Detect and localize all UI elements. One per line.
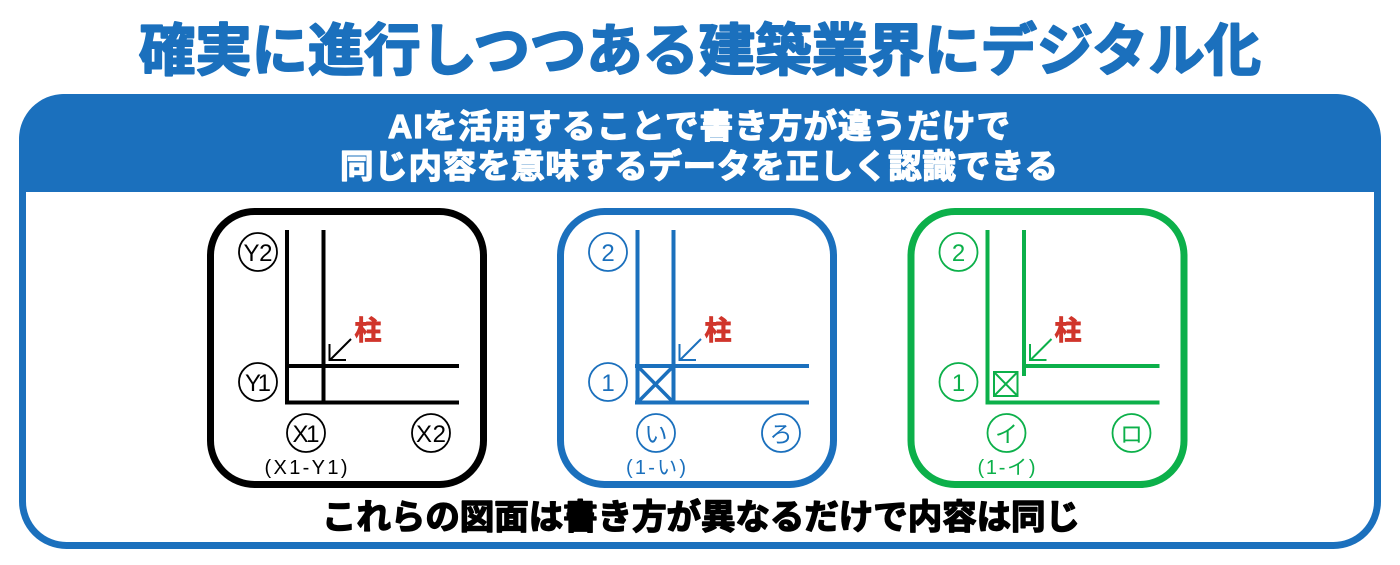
axis labels: イ	[995, 421, 1018, 447]
grid lines	[986, 230, 1160, 404]
axis labels: 1	[952, 370, 965, 397]
axis labels: 1	[601, 370, 615, 397]
column leader arrow	[330, 339, 351, 360]
axis labels: (1-い)	[626, 457, 686, 479]
column label: 柱	[704, 316, 732, 346]
header text: AIを活用することで書き方が違うだけで	[388, 108, 1010, 146]
axis labels: (X1-Y1)	[264, 457, 348, 479]
axis labels: X1	[292, 421, 320, 448]
header text	[340, 108, 1058, 186]
axis labels: 2	[601, 240, 615, 267]
drawing card: black, X/Y grid labels	[210, 212, 484, 484]
header band	[19, 94, 1381, 192]
panel frame	[22, 98, 1378, 546]
axis labels: 2	[952, 240, 965, 267]
column leader arrow	[1030, 339, 1052, 360]
axis labels	[940, 233, 1150, 479]
header text: 同じ内容を意味するデータを正しく認識できる	[340, 148, 1058, 186]
axis labels: ろ	[770, 421, 792, 447]
grid lines	[285, 230, 459, 404]
axis labels	[239, 233, 450, 479]
hatched column	[638, 366, 674, 402]
axis labels: い	[644, 421, 668, 447]
axis labels	[589, 233, 800, 479]
hatched column	[994, 372, 1018, 396]
title: 確実に進行しつつある建築業界にデジタル化	[139, 19, 1261, 82]
drawing card: blue, number/kana labels	[560, 212, 834, 484]
column label: 柱	[1054, 316, 1082, 346]
bottom caption: これらの図面は書き方が異なるだけで内容は同じ	[322, 498, 1080, 537]
grid lines	[635, 230, 809, 404]
axis labels: X2	[416, 421, 446, 448]
axis labels: Y2	[244, 240, 272, 267]
axis labels: Y1	[245, 370, 271, 397]
column label: 柱	[354, 316, 382, 346]
main panel	[19, 94, 1381, 546]
drawing card: green, number/katakana labels	[911, 212, 1184, 484]
axis labels: ロ	[1120, 421, 1143, 447]
column leader arrow	[680, 339, 701, 360]
axis labels: (1-イ)	[978, 457, 1036, 479]
